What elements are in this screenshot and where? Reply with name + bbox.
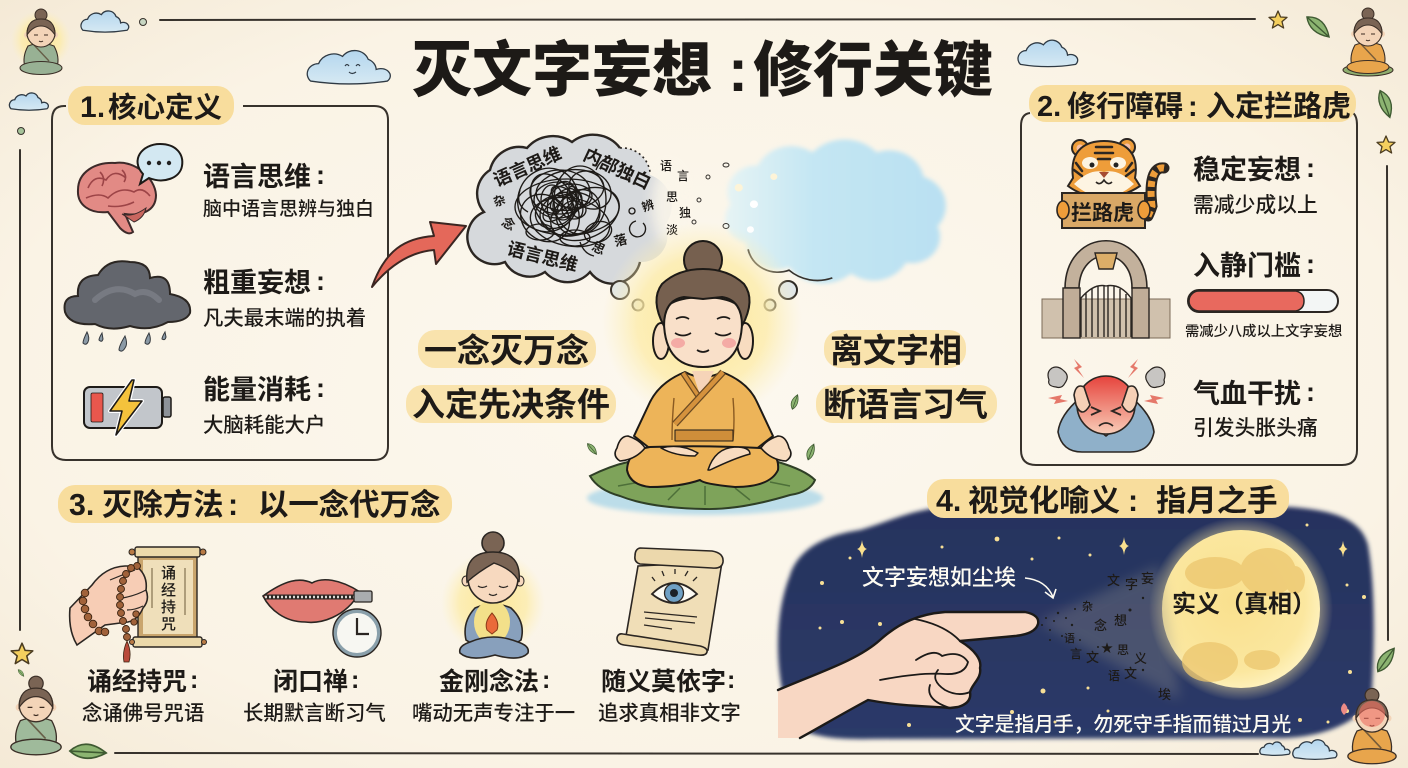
text: stable delusion [1193, 153, 1318, 217]
icon: small meditator with flame [441, 532, 545, 658]
icon: tiger holding sign: 拦路虎 [1071, 202, 1134, 225]
text: coarse delusion: 粗重妄想 [203, 268, 311, 298]
icon: scroll with eye [617, 548, 723, 655]
arrow: red curved arrow to thought cloud [372, 222, 466, 287]
dust stream: 妄 [1141, 571, 1154, 586]
dust stream: 文 [1107, 573, 1120, 588]
heading: practice obstacles: 2. [1037, 91, 1061, 123]
heading: practice obstacles: 入定拦路虎 [1206, 90, 1351, 123]
text: qi and blood: : [1306, 377, 1315, 407]
text: stable delusion: : [1306, 153, 1315, 183]
callout: prerequisite of samadhi: 入定先决条件 [412, 386, 610, 423]
cloud words: 语言思维 [505, 238, 580, 275]
panel: 2 practice obstacles [1021, 85, 1357, 465]
dust stream: 文 [1124, 666, 1137, 681]
dust stream: 念 [1094, 618, 1107, 633]
heading: core definition [68, 86, 234, 125]
scribble [509, 158, 646, 256]
icon: storm cloud [65, 261, 190, 351]
heading: core definition: . [97, 92, 105, 124]
text: coarse delusion [203, 266, 366, 330]
icon: low battery with lightning [84, 380, 171, 435]
heading: elimination methods [58, 485, 452, 523]
panel: 4 pointing at the moon [778, 479, 1374, 739]
icon: scroll and prayer beads: 诵 [161, 565, 176, 582]
heading: pointing at the moon: 指月之手 [1156, 484, 1278, 518]
text: coarse delusion: : [316, 266, 325, 296]
night sky [778, 507, 1374, 739]
moon: 实义（真相） [1172, 591, 1316, 618]
cloud words: 语 [660, 158, 672, 173]
text: qi and blood: 引发头胀头痛 [1193, 417, 1318, 440]
dust stream: 言 [1070, 646, 1082, 661]
corner decoration: top right monk [1343, 8, 1393, 76]
cloud words: 思 [666, 190, 678, 204]
cloud words: 落 [612, 231, 629, 249]
callout: cut language habit: 断语言习气 [823, 386, 988, 423]
text: qi and blood [1193, 377, 1318, 440]
text: threshold note: 需减少八成以上文字妄想 [1185, 322, 1342, 340]
icon: scroll and prayer beads: 经 [161, 582, 176, 599]
text: language thinking: : [316, 160, 325, 190]
dust stream: 思 [1117, 643, 1129, 657]
heading: pointing at the moon: 4. [936, 484, 961, 518]
method: silence: : [351, 666, 359, 694]
icon: scroll and prayer beads: 咒 [161, 616, 176, 633]
pointing hand [778, 612, 1038, 738]
illustration: meditating monk on lotus leaf [586, 222, 823, 515]
method: vajra recitation: 金刚念法 [439, 668, 539, 696]
heading: elimination methods: : [228, 488, 238, 522]
method: silence [243, 580, 386, 725]
cloud words: 语言思维 [490, 143, 564, 191]
method: follow the meaning [598, 548, 741, 725]
dust stream: 埃 [1158, 687, 1171, 702]
text: dust label [862, 565, 1056, 598]
head [653, 241, 753, 367]
method: follow the meaning: 随义莫依字 [601, 668, 726, 696]
cloud words: 念 [499, 214, 518, 234]
text: threshold of stillness: 入静门槛 [1193, 251, 1301, 281]
dust stream: 杂 [1082, 599, 1093, 613]
cloud words [490, 143, 691, 275]
lotus leaf [590, 462, 815, 509]
cloud words: 淡 [666, 223, 678, 237]
cloud words: 杂 [491, 191, 508, 210]
dust stream: 想 [1114, 613, 1127, 628]
heading: elimination methods: 3. [69, 488, 94, 522]
method: vajra recitation: 嘴动无声专注于一 [412, 702, 575, 725]
method: silence: 长期默言断习气 [243, 702, 386, 725]
icon: tiger holding sign [1057, 139, 1164, 228]
title: 修行关键 [753, 37, 993, 104]
cloud words: 独 [679, 205, 691, 220]
thought bubbles [611, 281, 797, 310]
panel: 1 core definition [52, 86, 388, 460]
cloud words: 言 [677, 168, 689, 183]
text: energy consumption: : [316, 373, 325, 403]
heading: core definition: 1 [80, 91, 97, 124]
lower right clouds and leaf [1260, 645, 1398, 759]
text: dust label: 文字妄想如尘埃 [862, 565, 1016, 590]
text: threshold of stillness: : [1306, 249, 1315, 279]
corner decoration: bottom left monk [11, 676, 61, 755]
text: energy consumption: 大脑耗能大户 [203, 414, 325, 437]
dust stream: ★ [1101, 641, 1113, 655]
corner decoration: top left monk [11, 9, 71, 74]
callout: leave word form: 离文字相 [830, 332, 962, 369]
cloud words: 辨 [640, 197, 656, 215]
method: chanting: 诵经持咒 [87, 668, 187, 696]
dust stream: 语 [1108, 668, 1120, 683]
method: chanting: 念诵佛号咒语 [82, 701, 204, 725]
heading: practice obstacles [1029, 85, 1356, 123]
progress bar: 80 percent [1188, 290, 1338, 312]
cloud: grey tangled thoughts [467, 135, 691, 284]
icon: zipped lips and clock [263, 580, 381, 657]
cloud words: 内部独白 [580, 144, 654, 193]
text: stable delusion: 需减少成以上 [1193, 194, 1318, 217]
heading: pointing at the moon: 视觉化喻义 [968, 484, 1120, 518]
icon: brain with speech bubble [78, 144, 182, 233]
heading: pointing at the moon: : [1128, 484, 1138, 518]
title: : [728, 37, 748, 104]
heading: elimination methods: 灭除方法 [102, 488, 224, 522]
method: follow the meaning: : [727, 666, 735, 694]
chart: dissolving thought clouds [467, 135, 946, 310]
method: vajra recitation: : [542, 666, 550, 694]
text: language thinking: 脑中语言思辨与独白 [203, 198, 374, 220]
icon: scroll and prayer beads: 持 [161, 599, 176, 616]
dust stream: 义 [1134, 651, 1147, 666]
icon: stone arch gate [1042, 241, 1170, 338]
icon: person with headache [1048, 359, 1165, 452]
dust stream: 语 [1064, 631, 1075, 645]
heading: practice obstacles: 修行障碍 [1067, 90, 1183, 123]
heading: core definition: 核心定义 [108, 92, 222, 124]
heading: pointing at the moon [927, 479, 1289, 518]
callout: one thought extinguishes: 一念灭万念 [424, 332, 589, 369]
icon: scroll and prayer beads [70, 547, 207, 662]
text: coarse delusion: 凡夫最末端的执着 [203, 307, 366, 330]
stars [818, 524, 1366, 727]
dust stream [1038, 565, 1180, 702]
method: silence: 闭口禅 [273, 668, 348, 696]
panel: 3 elimination methods [58, 485, 741, 725]
method: chanting: : [190, 666, 198, 694]
text: moon metaphor: 文字是指月手，勿死守手指而错过月光 [955, 714, 1292, 736]
dust stream: 字 [1125, 577, 1138, 592]
text: language thinking: 语言思维 [203, 162, 311, 192]
cloud words: 思 [590, 239, 608, 258]
text: qi and blood: 气血干扰 [1193, 379, 1301, 409]
title: 灭文字妄想 [412, 37, 712, 104]
method: vajra recitation [412, 532, 575, 725]
corner decoration: bottom right monk with red head [1341, 688, 1396, 764]
text: energy consumption: 能量消耗 [203, 375, 311, 405]
robe [615, 371, 791, 487]
moon [1149, 517, 1333, 701]
heading: elimination methods: 以一念代万念 [258, 487, 440, 522]
dissolving specks [692, 163, 729, 228]
heading: practice obstacles: : [1188, 91, 1198, 123]
method: follow the meaning: 追求真相非文字 [598, 702, 741, 725]
dust stream: 文 [1086, 650, 1099, 665]
method: chanting [70, 547, 207, 725]
text: energy consumption [203, 373, 325, 437]
cloud: pale blue clear mind [725, 140, 946, 283]
text: stable delusion: 稳定妄想 [1193, 155, 1301, 185]
text: language thinking [203, 160, 374, 220]
